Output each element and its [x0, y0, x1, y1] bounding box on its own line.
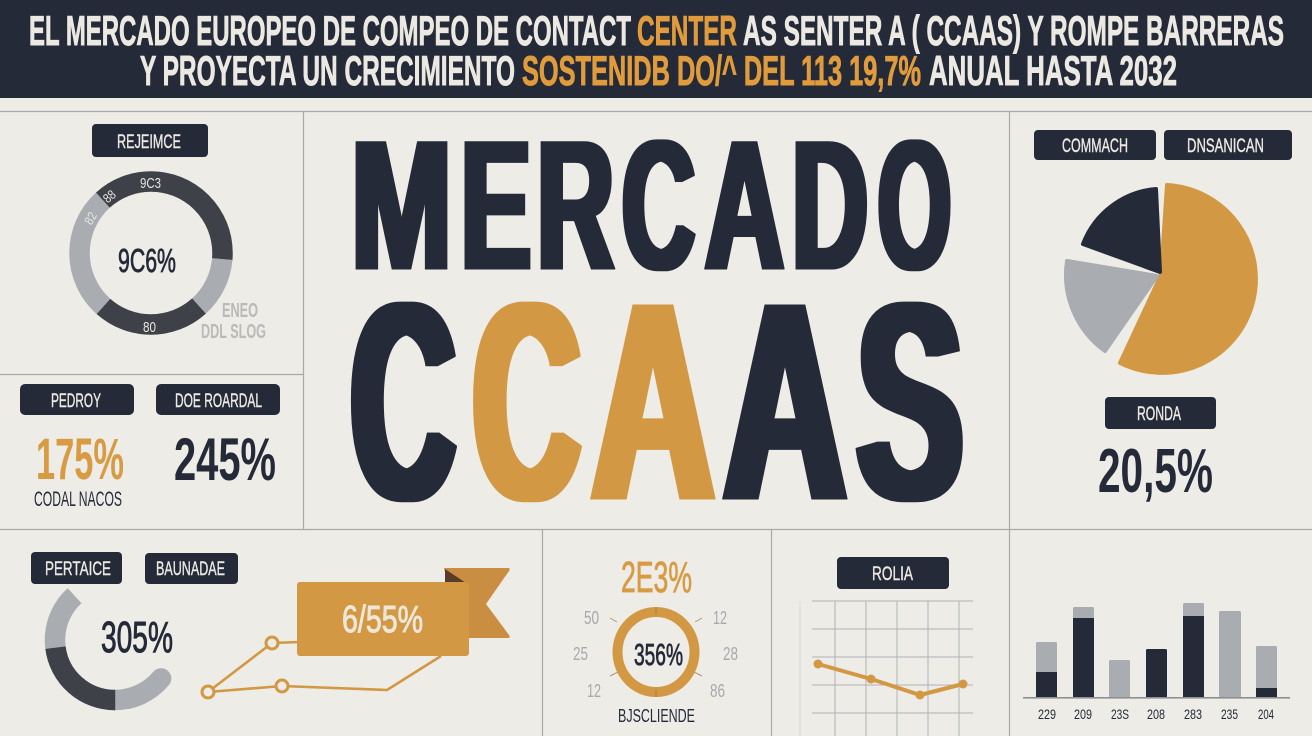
bar labels: 283 [1184, 706, 1202, 722]
label pill: doe roardal: DOE ROARDAL [175, 391, 262, 412]
ring value: 356% [634, 637, 683, 672]
title banner: EL MERCADO EUROPEO DE COMPEO DE CONTACT [29, 7, 631, 54]
heading: mercado: E [461, 103, 531, 309]
bar labels: 235 [1221, 706, 1238, 722]
donut side note: DDL SLOG [201, 321, 266, 343]
bar labels: 208 [1147, 706, 1165, 722]
heading: mercado: A [705, 103, 784, 309]
label pill: ronda [1105, 397, 1216, 429]
label pill: baunadae [145, 553, 238, 584]
label pill: revenue [92, 124, 208, 157]
heading: mercado: R [537, 103, 614, 309]
ring [610, 607, 702, 697]
heading: ccaas: A [724, 244, 846, 559]
title banner: Y PROYECTA UN CRECIMIENTO [140, 47, 515, 94]
ring tick labels [573, 608, 738, 701]
arc gauge [55, 580, 175, 700]
bar labels [1038, 706, 1274, 722]
heading: mercado: D [792, 103, 868, 309]
label pill: rolia [837, 557, 949, 589]
label pill: ronda: RONDA [1137, 404, 1181, 425]
label pill: commach [1034, 130, 1156, 160]
donut labels: 9C3 [140, 175, 161, 192]
panel: left stats [20, 384, 280, 511]
label pill: commach: COMMACH [1062, 136, 1128, 157]
ring tick labels: 28 [723, 644, 738, 664]
panel: bottom left gauge and ribbon [31, 552, 510, 700]
panel: pie chart [1034, 130, 1292, 506]
heading: mercado: C [622, 103, 695, 309]
label pill: pertaice [31, 552, 122, 584]
ring tick labels: 86 [710, 681, 725, 701]
ring tick labels: 12 [713, 608, 727, 628]
heading: mercado: M [351, 103, 452, 309]
connector line [202, 637, 441, 698]
bar labels: 229 [1038, 706, 1056, 722]
bar labels: 204 [1258, 706, 1274, 722]
stat: 2E3%: 2E3% [621, 553, 692, 602]
donut labels: 88 [100, 187, 119, 206]
stat: 20,5%: 20,5% [1098, 437, 1213, 506]
donut chart [80, 182, 222, 324]
label pill: dnsanican [1164, 130, 1292, 160]
ribbon callout [297, 568, 510, 656]
label pill: rolia: ROLIA [872, 564, 913, 585]
bar labels: 209 [1074, 706, 1092, 722]
heading: ccaas: C [351, 244, 455, 559]
panel: bar chart [1023, 603, 1290, 722]
donut side note [201, 300, 266, 343]
gauge value: 305% [101, 613, 173, 662]
label pill: dnsanican: DNSANICAN [1187, 136, 1264, 157]
panel: revenue donut [80, 124, 266, 343]
heading: ccaas: S [857, 244, 963, 559]
heading: mercado [351, 103, 951, 309]
label pill: doe roardal [156, 384, 280, 415]
ring tick labels: 12 [587, 681, 601, 701]
heading: ccaas: C [473, 244, 580, 559]
donut labels: 80 [143, 319, 156, 336]
title banner: SOSTENIDB DO/^ DEL 113 19,7% [522, 47, 921, 94]
line chart [800, 601, 973, 736]
ribbon callout: 6/55% [342, 599, 423, 641]
title banner: CENTER [637, 7, 737, 54]
panel: central title [351, 103, 963, 559]
label pill: pertaice: PERTAICE [45, 559, 111, 580]
donut labels [81, 175, 161, 336]
donut value: 9C6% [118, 242, 176, 279]
heading: ccaas [351, 244, 963, 559]
title banner [0, 0, 1312, 98]
label pill: pedroy: PEDROY [51, 391, 101, 412]
ring caption: BJSCLIENDE [618, 706, 695, 726]
stat caption: CODAL NACOS [34, 488, 122, 511]
ring tick labels: 25 [573, 644, 588, 664]
heading: mercado: O [878, 103, 951, 309]
donut labels: 82 [81, 209, 100, 227]
stat: 175%: 175% [36, 427, 124, 492]
ring tick labels: 50 [584, 608, 599, 628]
bars [1023, 603, 1290, 699]
pie slices [1066, 185, 1256, 373]
label pill: pedroy [20, 384, 134, 415]
heading: ccaas: A [592, 244, 714, 559]
panel: ring gauge [573, 553, 738, 726]
bar labels: 23S [1111, 706, 1129, 722]
donut side note: ENEO [222, 300, 258, 322]
stat: 245%: 245% [174, 426, 276, 493]
panel: line chart [800, 557, 973, 736]
label pill: revenue: REJEIMCE [117, 132, 181, 153]
label pill: baunadae: BAUNADAE [156, 559, 225, 580]
